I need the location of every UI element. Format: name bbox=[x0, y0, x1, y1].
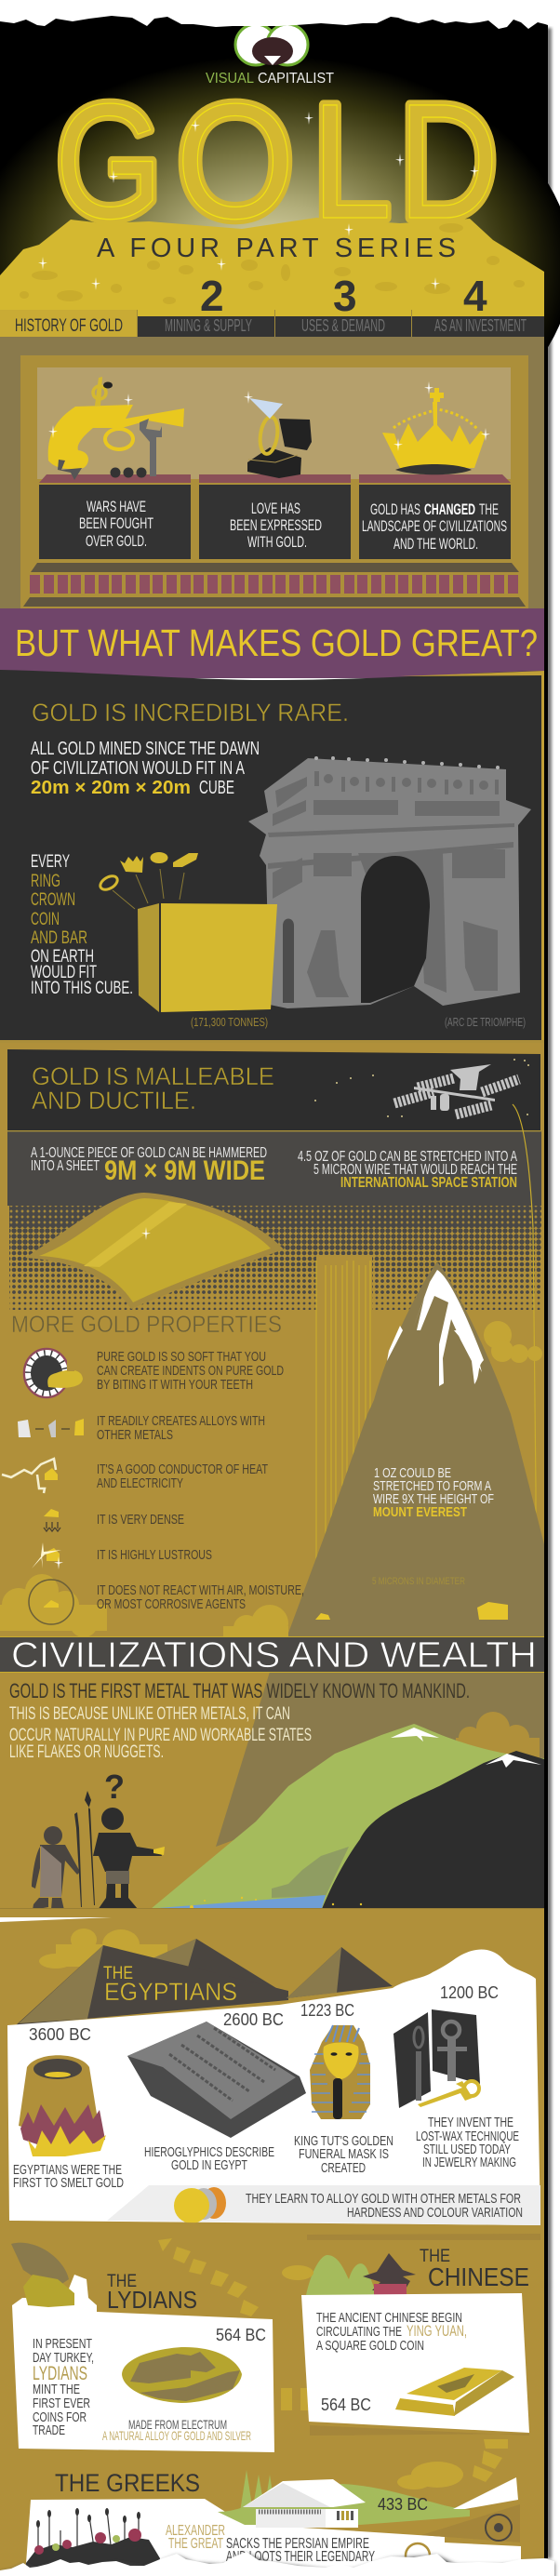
dates: 1223 BC bbox=[300, 2001, 354, 2020]
cube caption bbox=[31, 852, 133, 998]
pile coins bbox=[20, 223, 525, 304]
sheet text: INTO A SHEET bbox=[31, 1158, 100, 1174]
icon: king tut mask bbox=[310, 2025, 370, 2119]
title: GOLD: O bbox=[176, 71, 295, 253]
cube caption: INTO THIS CUBE. bbox=[31, 979, 133, 998]
property list: AND ELECTRICITY bbox=[97, 1475, 183, 1491]
title highlight: D bbox=[398, 71, 499, 253]
description bbox=[33, 2336, 94, 2438]
icon: gold pistol bbox=[48, 377, 184, 480]
cloud bbox=[39, 1929, 167, 1969]
dates: 2600 BC bbox=[223, 2010, 284, 2029]
gold pile bbox=[0, 218, 544, 316]
captions bbox=[13, 2115, 519, 2191]
heading: more properties: MORE GOLD PROPERTIES bbox=[11, 1312, 282, 1338]
heading: LYDIANS bbox=[107, 2286, 197, 2314]
snow bbox=[391, 1728, 439, 1742]
plaque: love: LOVE HAS bbox=[251, 500, 300, 517]
figure: robed person bbox=[32, 1812, 82, 1910]
panel: malleable and properties: 5 MICRONS IN DIAMETER bbox=[372, 1576, 465, 1587]
property list: IT READILY CREATES ALLOYS WITH bbox=[97, 1413, 265, 1429]
description bbox=[316, 2310, 467, 2354]
wire to station bbox=[511, 1104, 536, 1608]
heading: AND DUCTILE. bbox=[32, 1087, 196, 1114]
cube caption: WOULD FIT bbox=[31, 963, 97, 982]
decorative dashes bbox=[158, 2238, 508, 2482]
cube caption: CROWN bbox=[31, 890, 75, 910]
property list: IT'S A GOOD CONDUCTOR OF HEAT bbox=[97, 1462, 268, 1477]
heading bbox=[103, 1964, 237, 2006]
property list: BY BITING IT WITH YOUR TEETH bbox=[97, 1377, 253, 1393]
stars bbox=[314, 1059, 529, 1117]
captions: STILL USED TODAY bbox=[423, 2142, 511, 2157]
plinth tops bbox=[39, 474, 511, 483]
plaque: civilizations: AND THE WORLD. bbox=[393, 535, 478, 553]
title highlight: G bbox=[55, 71, 163, 253]
icon: gold bar bbox=[395, 2368, 514, 2416]
subtitle: A FOUR PART SERIES bbox=[97, 234, 456, 263]
heading: THE GREEKS bbox=[55, 2469, 200, 2497]
title: GOLD: G bbox=[55, 71, 163, 253]
nuggets bbox=[315, 1602, 508, 1620]
captions: FUNERAL MASK IS bbox=[299, 2146, 389, 2162]
plaque: wars: BEEN FOUGHT bbox=[79, 514, 153, 532]
black mountain bbox=[322, 1751, 544, 1909]
title: GOLD bbox=[55, 71, 499, 253]
white timeline card bbox=[7, 1950, 540, 2225]
cube caption: EVERY bbox=[31, 852, 70, 872]
heading: GOLD IS MALLEABLE bbox=[32, 1062, 274, 1090]
title highlight: L bbox=[312, 71, 392, 253]
description: ALEXANDER bbox=[166, 2523, 225, 2539]
property list bbox=[97, 1349, 304, 1612]
icon: temple bbox=[243, 2479, 366, 2528]
part numbers: 3 bbox=[333, 272, 357, 320]
heading bbox=[32, 1062, 274, 1114]
panel: lydians and chinese and greeks background bbox=[0, 2221, 544, 2576]
case steps bbox=[31, 563, 519, 572]
intro text: ALL GOLD MINED SINCE THE DAWN bbox=[31, 739, 260, 759]
civilizations intro text: THIS IS BECAUSE UNLIKE OTHER METALS, IT CAN bbox=[9, 1704, 290, 1724]
icon: furnace bbox=[19, 2055, 106, 2156]
plaque: civilizations: THE bbox=[479, 501, 499, 518]
mountain text: 1 OZ COULD BE bbox=[374, 1465, 451, 1481]
part numbers: 2 bbox=[200, 272, 224, 320]
streak bbox=[0, 1917, 112, 1922]
big mountain slope bbox=[216, 1672, 544, 1847]
panel: chinese: 564 BC bbox=[321, 2396, 371, 2414]
gold cube bbox=[138, 903, 277, 1012]
spears bbox=[38, 2510, 139, 2554]
captions: FIRST TO SMELT GOLD bbox=[13, 2175, 124, 2191]
captions: CREATED bbox=[321, 2160, 366, 2176]
panel: greeks bbox=[25, 2462, 521, 2576]
description: THE ANCIENT CHINESE BEGIN bbox=[316, 2310, 462, 2326]
mountain bbox=[270, 1262, 544, 1675]
cloud bbox=[397, 2462, 463, 2489]
torn paper edge: bottom bbox=[0, 2552, 560, 2576]
captions: EGYPTIANS WERE THE bbox=[13, 2162, 122, 2178]
mountain text: WIRE 9X THE HEIGHT OF bbox=[373, 1491, 494, 1507]
space panel bbox=[7, 1049, 540, 1133]
property list: PURE GOLD IS SO SOFT THAT YOU bbox=[97, 1349, 266, 1365]
description: YING YUAN, bbox=[407, 2322, 467, 2340]
panel: lydians: 564 BC bbox=[216, 2326, 266, 2344]
panel: header bbox=[0, 14, 560, 474]
mountain text: STRETCHED TO FORM A bbox=[373, 1478, 491, 1494]
cloud bbox=[456, 1712, 540, 1758]
plaque: wars: OVER GOLD. bbox=[86, 532, 147, 550]
hill shadow bbox=[272, 1847, 349, 1898]
sparkles bbox=[38, 112, 479, 290]
banner: civilizations and wealth: CIVILIZATIONS AND WEALTH bbox=[11, 1635, 537, 1675]
description: COINS FOR bbox=[33, 2409, 87, 2425]
plaque: wars: WARS HAVE bbox=[87, 498, 146, 515]
right edge shadow bbox=[546, 28, 552, 2558]
description: MINT THE bbox=[33, 2382, 80, 2397]
hills bbox=[306, 2255, 377, 2295]
logo bbox=[206, 24, 334, 87]
description: LYDIANS bbox=[33, 2363, 87, 2384]
wire bundle bbox=[316, 1255, 372, 1610]
sheet text: A 1-OUNCE PIECE OF GOLD CAN BE HAMMERED bbox=[31, 1145, 267, 1161]
arc statues bbox=[307, 921, 498, 997]
property list: IT IS VERY DENSE bbox=[97, 1512, 184, 1528]
figure: person with spear bbox=[85, 1768, 165, 1910]
panel: chinese bbox=[282, 2247, 529, 2436]
panel: egyptians bbox=[0, 1908, 544, 2230]
icon: alloy bbox=[18, 1419, 84, 1437]
intro text: 20m × 20m × 20m bbox=[31, 778, 191, 798]
icon: conductor bbox=[2, 1459, 58, 1493]
civilizations intro text: LIKE FLAKES OR NUGGETS. bbox=[9, 1742, 164, 1762]
heading: THE bbox=[420, 2247, 450, 2266]
panel: civilizations landscape bbox=[0, 1672, 544, 1923]
property list: OR MOST CORROSIVE AGENTS bbox=[97, 1596, 246, 1612]
description: SACKS THE PERSIAN EMPIRE bbox=[226, 2536, 369, 2552]
green hill bbox=[151, 1724, 544, 1909]
banner: but what makes gold great bbox=[0, 608, 544, 678]
heading bbox=[107, 2272, 197, 2314]
part numbers: 4 bbox=[463, 272, 487, 320]
maroon balustrade bbox=[30, 575, 518, 594]
panel: malleable and properties: 9M × 9M WIDE bbox=[104, 1155, 265, 1186]
part numbers bbox=[200, 272, 487, 320]
bottom left clouds bbox=[0, 1574, 288, 1642]
space station bbox=[394, 1064, 519, 1114]
icon: diamond ring bbox=[244, 391, 312, 478]
intro text: OF CIVILIZATION WOULD FIT IN A bbox=[31, 758, 245, 779]
icon: dense bbox=[44, 1509, 60, 1531]
description: CIRCULATING THE bbox=[316, 2324, 402, 2340]
soldiers bbox=[26, 2529, 160, 2568]
plaque: civilizations bbox=[359, 485, 511, 559]
logo: VISUAL bbox=[206, 71, 254, 87]
heading: THE bbox=[103, 1964, 133, 1983]
title: GOLD: L bbox=[312, 71, 392, 253]
panel: lydians bbox=[11, 2243, 274, 2452]
panel: greeks: 433 BC bbox=[378, 2495, 428, 2514]
plaque: civilizations: GOLD HAS bbox=[370, 501, 420, 518]
title highlight bbox=[55, 71, 499, 253]
intro text: CUBE bbox=[199, 778, 234, 798]
description: DAY TURKEY, bbox=[33, 2350, 94, 2366]
plaque: wars bbox=[39, 485, 191, 559]
green hill bbox=[218, 2484, 470, 2525]
icon: lydian coin bbox=[122, 2347, 242, 2403]
cypress trees bbox=[240, 2470, 275, 2512]
panel: display case bbox=[0, 337, 544, 612]
captions: (171,300 TONNES) bbox=[191, 1015, 268, 1029]
river bbox=[146, 1895, 326, 1912]
description: FIRST EVER bbox=[33, 2396, 90, 2411]
icon: crown bbox=[382, 381, 490, 474]
property list: OTHER METALS bbox=[97, 1427, 173, 1443]
tabs: USES & DEMAND bbox=[301, 316, 385, 335]
description bbox=[166, 2523, 375, 2565]
dates: 3600 BC bbox=[29, 2025, 91, 2044]
icon: lydian head bbox=[11, 2243, 74, 2307]
golden glow bbox=[0, 56, 560, 474]
civilizations intro text: OCCUR NATURALLY IN PURE AND WORKABLE STATES bbox=[9, 1726, 312, 1745]
cube caption: RING bbox=[31, 872, 60, 891]
captions: KING TUT'S GOLDEN bbox=[294, 2133, 393, 2149]
coin caption: MADE FROM ELECTRUM bbox=[128, 2417, 227, 2432]
property list: CAN CREATE INDENTS ON PURE GOLD bbox=[97, 1363, 284, 1379]
alloy band bbox=[107, 2185, 540, 2225]
title: GOLD: D bbox=[398, 71, 499, 253]
plaque: love: BEEN EXPRESSED bbox=[230, 516, 322, 534]
heading: GOLD IS INCREDIBLY RARE. bbox=[32, 699, 349, 727]
shadow band bbox=[307, 2234, 540, 2240]
cube caption: ON EARTH bbox=[31, 947, 94, 967]
heading: EGYPTIANS bbox=[104, 1978, 237, 2006]
figure: person with spear: ? bbox=[104, 1768, 125, 1806]
property list: IT DOES NOT REACT WITH AIR, MOISTURE, bbox=[97, 1582, 304, 1598]
mountain text: MOUNT EVEREST bbox=[373, 1504, 467, 1520]
description: AND LOOTS THEIR LEGENDARY bbox=[226, 2549, 375, 2565]
plaque: civilizations: CHANGED bbox=[424, 501, 475, 518]
dates bbox=[29, 1983, 499, 2044]
description: IN PRESENT bbox=[33, 2336, 92, 2352]
torn paper edge: top bbox=[0, 0, 560, 29]
panel: lydians: A NATURAL ALLOY OF GOLD AND SILVER bbox=[102, 2428, 251, 2443]
cube caption: COIN bbox=[31, 910, 60, 929]
heading: CHINESE bbox=[428, 2262, 529, 2291]
intro text bbox=[31, 739, 260, 798]
icon: non reactive bbox=[29, 1580, 73, 1624]
icon: lustrous bbox=[32, 1542, 63, 1569]
nuggets bbox=[178, 1897, 362, 1914]
icon: building and shields bbox=[406, 2477, 521, 2570]
dates: 1200 BC bbox=[440, 1983, 499, 2002]
captions: THEY INVENT THE bbox=[428, 2115, 513, 2130]
plaque: love bbox=[199, 485, 351, 559]
cube caption: AND BAR bbox=[31, 928, 87, 948]
heading: THE bbox=[107, 2272, 137, 2291]
heading bbox=[420, 2247, 529, 2291]
icon: tablet bbox=[127, 2022, 306, 2138]
icons: ring crown coin bar bbox=[98, 852, 198, 909]
icon: pagoda bbox=[363, 2253, 416, 2295]
halftone dots bbox=[9, 1206, 541, 1310]
tabs: MINING & SUPPLY bbox=[165, 316, 252, 335]
pyramids bbox=[16, 1939, 393, 2025]
tabs bbox=[0, 310, 527, 338]
snow cap bbox=[387, 1270, 484, 1386]
gold sheet bbox=[25, 1193, 284, 1309]
title highlight: O bbox=[176, 71, 295, 253]
description: TRADE bbox=[33, 2423, 65, 2438]
icon: teeth bbox=[24, 1349, 83, 1397]
panel: malleable and properties bbox=[0, 1043, 544, 1675]
plaque: love: WITH GOLD. bbox=[247, 533, 307, 551]
logo: CAPITALIST bbox=[258, 71, 334, 87]
captions: HIEROGLYPHICS DESCRIBE bbox=[144, 2144, 274, 2160]
panel: gold is rare bbox=[0, 670, 544, 1044]
right cloud bbox=[484, 1321, 542, 1363]
sheet text bbox=[31, 1145, 267, 1174]
white ground bbox=[25, 2499, 447, 2576]
property list: IT IS HIGHLY LUSTROUS bbox=[97, 1547, 212, 1563]
description: A SQUARE GOLD COIN bbox=[316, 2338, 424, 2354]
icon: mold and ankh bbox=[393, 2009, 480, 2108]
description: THE GREAT bbox=[168, 2536, 223, 2552]
tabs: HISTORY OF GOLD bbox=[15, 316, 123, 336]
mountain text bbox=[373, 1465, 494, 1520]
cloud bbox=[282, 2265, 313, 2280]
captions: GOLD IN EGYPT bbox=[171, 2157, 247, 2173]
arc de triomphe bbox=[248, 756, 531, 1008]
wire text bbox=[298, 1149, 517, 1191]
civilizations intro text bbox=[9, 1679, 470, 1762]
